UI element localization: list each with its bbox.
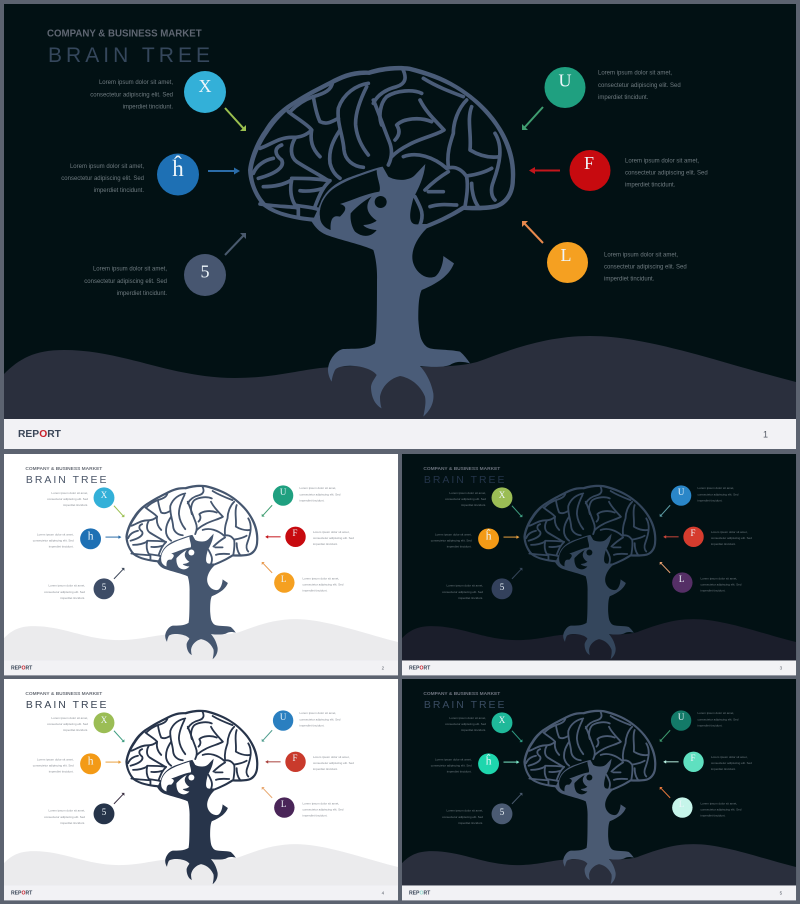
callout: U xyxy=(660,710,739,742)
icon: h badge: ĥ xyxy=(486,529,492,543)
icon: 5 badge: 5 xyxy=(102,582,107,592)
panel: slide 4 xyxy=(4,679,398,900)
text block: consectetur adipiscing elit. Sed xyxy=(711,536,752,540)
footer bar: 1 xyxy=(763,430,768,440)
text block: imperdiet tincidunt. xyxy=(63,503,88,507)
callout: F xyxy=(529,150,708,191)
text block: consectetur adipiscing elit. Sed xyxy=(698,492,739,496)
text block: imperdiet tincidunt. xyxy=(711,542,736,546)
text block: Lorem ipsum dolor sit amet, xyxy=(37,758,74,762)
arrow xyxy=(114,731,124,742)
text block: consectetur adipiscing elit. Sed xyxy=(47,722,88,726)
footer bar xyxy=(4,419,796,449)
text block: imperdiet tincidunt. xyxy=(60,821,85,825)
arrow xyxy=(512,731,522,742)
text block: consectetur adipiscing elit. Sed xyxy=(303,583,344,587)
slide background xyxy=(4,679,398,885)
text block: imperdiet tincidunt. xyxy=(458,596,483,600)
arrow xyxy=(262,787,272,798)
text block: consectetur adipiscing elit. Sed xyxy=(47,497,88,501)
icon: X badge xyxy=(184,71,226,113)
callout: X xyxy=(90,71,246,131)
icon: X badge: X xyxy=(101,490,108,500)
footer bar xyxy=(402,660,796,675)
icon: X badge: X xyxy=(499,715,506,725)
slide background xyxy=(402,679,796,885)
text block: consectetur adipiscing elit. Sed xyxy=(445,497,486,501)
icon: L badge: L xyxy=(281,574,286,584)
text block: imperdiet tincidunt. xyxy=(313,767,338,771)
text block: imperdiet tincidunt. xyxy=(49,545,74,549)
text block: Lorem ipsum dolor sit amet, xyxy=(701,577,737,581)
text block: Lorem ipsum dolor sit amet, xyxy=(446,809,483,813)
arrow xyxy=(529,167,560,174)
arrow xyxy=(660,787,670,798)
footer bar: REPORT xyxy=(11,890,33,896)
text block: Lorem ipsum dolor sit amet, xyxy=(625,158,699,164)
text block: imperdiet tincidunt. xyxy=(625,182,676,188)
callout: X xyxy=(47,712,124,742)
arrow xyxy=(503,760,519,764)
subtitle: COMPANY & BUSINESS MARKET xyxy=(25,466,102,472)
callout: X xyxy=(47,487,124,517)
text block: consectetur adipiscing elit. Sed xyxy=(711,761,752,765)
icon: brain tree xyxy=(523,710,656,884)
arrow xyxy=(265,760,281,764)
callout: U xyxy=(262,710,341,742)
footer bar: 4 xyxy=(382,891,385,896)
footer bar xyxy=(4,660,398,675)
text block: Lorem ipsum dolor sit amet, xyxy=(701,802,737,806)
icon: F badge xyxy=(570,150,610,191)
arrow xyxy=(114,506,124,517)
icon: U badge xyxy=(544,67,586,108)
callout: 5 xyxy=(84,233,246,297)
icon: brain tree xyxy=(523,485,656,659)
text block: Lorem ipsum dolor sit amet, xyxy=(446,584,483,588)
icon: brain tree xyxy=(125,485,258,659)
callout: F xyxy=(663,752,752,772)
arrow xyxy=(114,568,124,579)
text block: imperdiet tincidunt. xyxy=(117,291,167,297)
arrow xyxy=(522,107,543,130)
text block: imperdiet tincidunt. xyxy=(313,542,338,546)
text block: imperdiet tincidunt. xyxy=(447,770,472,774)
text block: consectetur adipiscing elit. Sed xyxy=(604,264,687,270)
title: BRAIN TREE xyxy=(48,44,210,67)
icon: h badge xyxy=(157,154,199,196)
icon: L badge xyxy=(547,242,588,283)
text block: consectetur adipiscing elit. Sed xyxy=(313,761,354,765)
icon: X badge: X xyxy=(499,490,506,500)
arrow xyxy=(225,108,246,131)
text block: imperdiet tincidunt. xyxy=(701,814,726,818)
footer bar: REPORT xyxy=(18,429,62,440)
text block: Lorem ipsum dolor sit amet, xyxy=(313,530,350,534)
text block: imperdiet tincidunt. xyxy=(303,589,328,593)
panel: slide 5 xyxy=(402,679,796,900)
arrow xyxy=(512,506,522,517)
arrow xyxy=(663,535,679,539)
subtitle: COMPANY & BUSINESS MARKET xyxy=(423,691,500,697)
callout: U xyxy=(262,485,341,517)
text block: Lorem ipsum dolor sit amet, xyxy=(598,70,672,76)
arrow xyxy=(225,233,246,255)
callout: L xyxy=(522,221,687,283)
text block: Lorem ipsum dolor sit amet, xyxy=(48,584,85,588)
icon: U badge: U xyxy=(558,70,572,90)
arrow xyxy=(660,562,670,573)
text block: Lorem ipsum dolor sit amet, xyxy=(51,716,88,720)
text block: Lorem ipsum dolor sit amet, xyxy=(698,486,734,490)
callout: 5 xyxy=(44,793,124,825)
text block: consectetur adipiscing elit. Sed xyxy=(625,170,708,176)
footer bar xyxy=(402,885,796,900)
icon: 5 badge: 5 xyxy=(102,807,107,817)
callout: L xyxy=(262,787,344,818)
arrow xyxy=(512,568,522,579)
panel: slide 3 xyxy=(402,454,796,675)
title: BRAIN TREE xyxy=(26,475,107,486)
subtitle: COMPANY & BUSINESS MARKET xyxy=(47,28,202,40)
text block: imperdiet tincidunt. xyxy=(458,821,483,825)
panel: slide 1 xyxy=(4,4,796,449)
footer bar: 3 xyxy=(780,666,783,671)
text block: imperdiet tincidunt. xyxy=(49,770,74,774)
text block: imperdiet tincidunt. xyxy=(300,498,325,502)
text block: consectetur adipiscing elit. Sed xyxy=(303,808,344,812)
text block: imperdiet tincidunt. xyxy=(461,503,486,507)
text block: Lorem ipsum dolor sit amet, xyxy=(51,491,88,495)
text block: consectetur adipiscing elit. Sed xyxy=(431,539,472,543)
text block: imperdiet tincidunt. xyxy=(300,723,325,727)
hills xyxy=(4,336,796,419)
text block: Lorem ipsum dolor sit amet, xyxy=(37,533,74,537)
title: BRAIN TREE xyxy=(424,700,505,711)
text block: imperdiet tincidunt. xyxy=(94,188,144,194)
panel: slide 2 xyxy=(4,454,398,675)
text block: consectetur adipiscing elit. Sed xyxy=(33,764,74,768)
arrow xyxy=(105,535,121,539)
footer bar: REPORT xyxy=(11,665,33,671)
callout: h xyxy=(33,753,121,774)
callout: 5 xyxy=(442,568,522,600)
icon: h badge: ĥ xyxy=(486,754,492,768)
icon: brain tree xyxy=(125,710,258,884)
text block: imperdiet tincidunt. xyxy=(447,545,472,549)
slide background xyxy=(402,454,796,660)
callout: U xyxy=(660,485,739,517)
callout: U xyxy=(522,67,681,130)
hills xyxy=(402,844,796,885)
icon: L badge: L xyxy=(560,245,572,265)
text block: consectetur adipiscing elit. Sed xyxy=(300,717,341,721)
arrow xyxy=(522,221,543,243)
text block: consectetur adipiscing elit. Sed xyxy=(84,279,167,285)
text block: imperdiet tincidunt. xyxy=(698,723,723,727)
callout: L xyxy=(262,562,344,593)
title: BRAIN TREE xyxy=(424,475,505,486)
icon: L badge: L xyxy=(679,799,684,809)
text block: Lorem ipsum dolor sit amet, xyxy=(99,80,173,86)
text block: consectetur adipiscing elit. Sed xyxy=(701,583,742,587)
text block: imperdiet tincidunt. xyxy=(123,104,173,110)
hills xyxy=(402,619,796,660)
text block: consectetur adipiscing elit. Sed xyxy=(90,92,173,98)
callout: h xyxy=(431,753,519,774)
text block: imperdiet tincidunt. xyxy=(60,596,85,600)
icon: h badge: h xyxy=(88,531,94,543)
text block: imperdiet tincidunt. xyxy=(303,814,328,818)
text block: imperdiet tincidunt. xyxy=(701,589,726,593)
arrow xyxy=(660,730,670,742)
text block: imperdiet tincidunt. xyxy=(698,498,723,502)
icon: h badge: ĥ xyxy=(172,155,184,181)
text block: Lorem ipsum dolor sit amet, xyxy=(435,533,472,537)
text block: Lorem ipsum dolor sit amet, xyxy=(70,164,144,170)
callout: h xyxy=(33,528,121,549)
icon: F badge: F xyxy=(293,753,298,763)
hills xyxy=(4,844,398,885)
slide background xyxy=(4,454,398,660)
text block: imperdiet tincidunt. xyxy=(598,95,649,101)
icon: U badge: U xyxy=(280,487,287,497)
callout: 5 xyxy=(442,793,522,825)
callout: 5 xyxy=(44,568,124,600)
icon: 5 badge: 5 xyxy=(500,807,505,817)
slide background xyxy=(4,4,796,419)
text block: Lorem ipsum dolor sit amet, xyxy=(303,577,339,581)
text block: consectetur adipiscing elit. Sed xyxy=(445,722,486,726)
arrow xyxy=(114,793,124,804)
footer bar: REPORT xyxy=(409,890,431,896)
callout: L xyxy=(660,787,742,818)
arrow xyxy=(265,535,281,539)
icon: F badge: F xyxy=(691,528,696,538)
text block: consectetur adipiscing elit. Sed xyxy=(442,815,483,819)
text block: consectetur adipiscing elit. Sed xyxy=(701,808,742,812)
callout: X xyxy=(445,487,522,517)
callout: X xyxy=(445,712,522,742)
icon: L badge: L xyxy=(679,574,684,584)
text block: consectetur adipiscing elit. Sed xyxy=(300,492,341,496)
icon: F badge: F xyxy=(691,753,696,763)
text block: consectetur adipiscing elit. Sed xyxy=(698,717,739,721)
text block: consectetur adipiscing elit. Sed xyxy=(431,764,472,768)
text block: consectetur adipiscing elit. Sed xyxy=(442,590,483,594)
icon: F badge: F xyxy=(584,153,594,173)
text block: Lorem ipsum dolor sit amet, xyxy=(93,266,167,272)
hills xyxy=(4,619,398,660)
footer bar xyxy=(4,885,398,900)
text block: imperdiet tincidunt. xyxy=(604,276,655,282)
callout: F xyxy=(265,752,354,772)
callout: h xyxy=(431,528,519,549)
icon: X badge: X xyxy=(101,715,108,725)
callout: F xyxy=(663,527,752,547)
text block: Lorem ipsum dolor sit amet, xyxy=(604,252,678,258)
text block: Lorem ipsum dolor sit amet, xyxy=(313,755,350,759)
arrow xyxy=(660,505,670,517)
arrow xyxy=(663,760,679,764)
text block: Lorem ipsum dolor sit amet, xyxy=(698,711,734,715)
text block: Lorem ipsum dolor sit amet, xyxy=(449,491,486,495)
text block: Lorem ipsum dolor sit amet, xyxy=(300,711,336,715)
arrow xyxy=(262,562,272,573)
text block: consectetur adipiscing elit. Sed xyxy=(33,539,74,543)
icon: X badge: X xyxy=(198,76,212,96)
icon: U badge: U xyxy=(280,712,287,722)
callout: L xyxy=(660,562,742,593)
text block: Lorem ipsum dolor sit amet, xyxy=(300,486,336,490)
icon: U badge: U xyxy=(678,487,685,497)
icon: 5 badge xyxy=(184,254,226,296)
icon: 5 badge: 5 xyxy=(200,262,210,282)
icon: 5 badge: 5 xyxy=(500,582,505,592)
footer bar: REPORT xyxy=(409,665,431,671)
text block: Lorem ipsum dolor sit amet, xyxy=(48,809,85,813)
icon: F badge: F xyxy=(293,528,298,538)
text block: imperdiet tincidunt. xyxy=(461,728,486,732)
subtitle: COMPANY & BUSINESS MARKET xyxy=(423,466,500,472)
arrow xyxy=(105,760,121,764)
text block: Lorem ipsum dolor sit amet, xyxy=(449,716,486,720)
text block: Lorem ipsum dolor sit amet, xyxy=(711,755,748,759)
text block: Lorem ipsum dolor sit amet, xyxy=(303,802,339,806)
text block: Lorem ipsum dolor sit amet, xyxy=(711,530,748,534)
text block: consectetur adipiscing elit. Sed xyxy=(44,590,85,594)
text block: consectetur adipiscing elit. Sed xyxy=(598,83,681,89)
arrow xyxy=(208,168,240,174)
icon: U badge: U xyxy=(678,712,685,722)
subtitle: COMPANY & BUSINESS MARKET xyxy=(25,691,102,697)
title: BRAIN TREE xyxy=(26,700,107,711)
icon: brain tree xyxy=(248,66,515,417)
text block: consectetur adipiscing elit. Sed xyxy=(44,815,85,819)
arrow xyxy=(503,535,519,539)
text block: consectetur adipiscing elit. Sed xyxy=(61,176,144,182)
callout: h xyxy=(61,154,240,196)
text block: consectetur adipiscing elit. Sed xyxy=(313,536,354,540)
footer bar: 2 xyxy=(382,666,385,671)
callout: F xyxy=(265,527,354,547)
text block: Lorem ipsum dolor sit amet, xyxy=(435,758,472,762)
arrow xyxy=(262,730,272,742)
icon: h badge: h xyxy=(88,756,94,768)
arrow xyxy=(512,793,522,804)
text block: imperdiet tincidunt. xyxy=(63,728,88,732)
arrow xyxy=(262,505,272,517)
footer bar: 5 xyxy=(780,891,783,896)
text block: imperdiet tincidunt. xyxy=(711,767,736,771)
icon: L badge: L xyxy=(281,799,286,809)
